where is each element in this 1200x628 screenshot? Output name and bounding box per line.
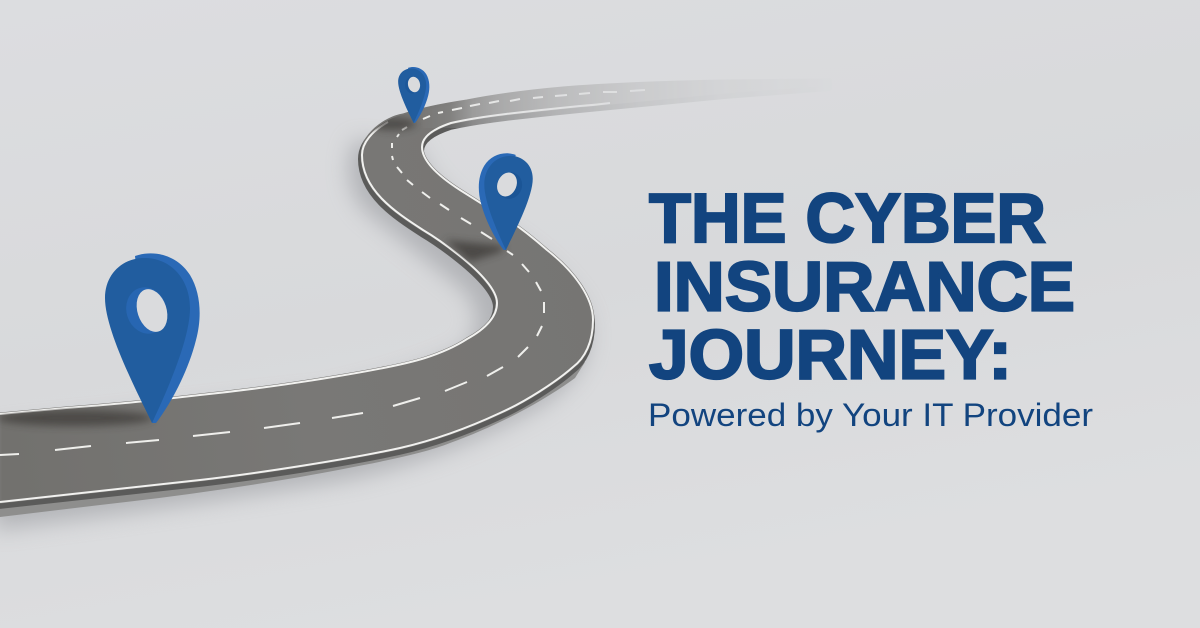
road cast shadow (0, 140, 588, 530)
title: JOURNEY: (649, 316, 1012, 394)
pin shadows on road (0, 118, 505, 426)
road side wall (0, 94, 733, 509)
road edge line: lower (0, 103, 610, 502)
banner illustration (0, 67, 1092, 535)
road edge line: upper (0, 122, 497, 414)
title (649, 179, 1075, 394)
location pin: far (398, 67, 429, 123)
title: INSURANCE (654, 248, 1075, 326)
road centre dashes (0, 90, 645, 455)
road (0, 80, 733, 536)
road underside band (0, 362, 585, 517)
title: THE CYBER (649, 179, 1046, 257)
location pin: middle (479, 153, 533, 250)
location pin: near (105, 253, 200, 423)
road surface (0, 80, 707, 504)
subtitle: Powered by Your IT Provider (648, 397, 1093, 433)
